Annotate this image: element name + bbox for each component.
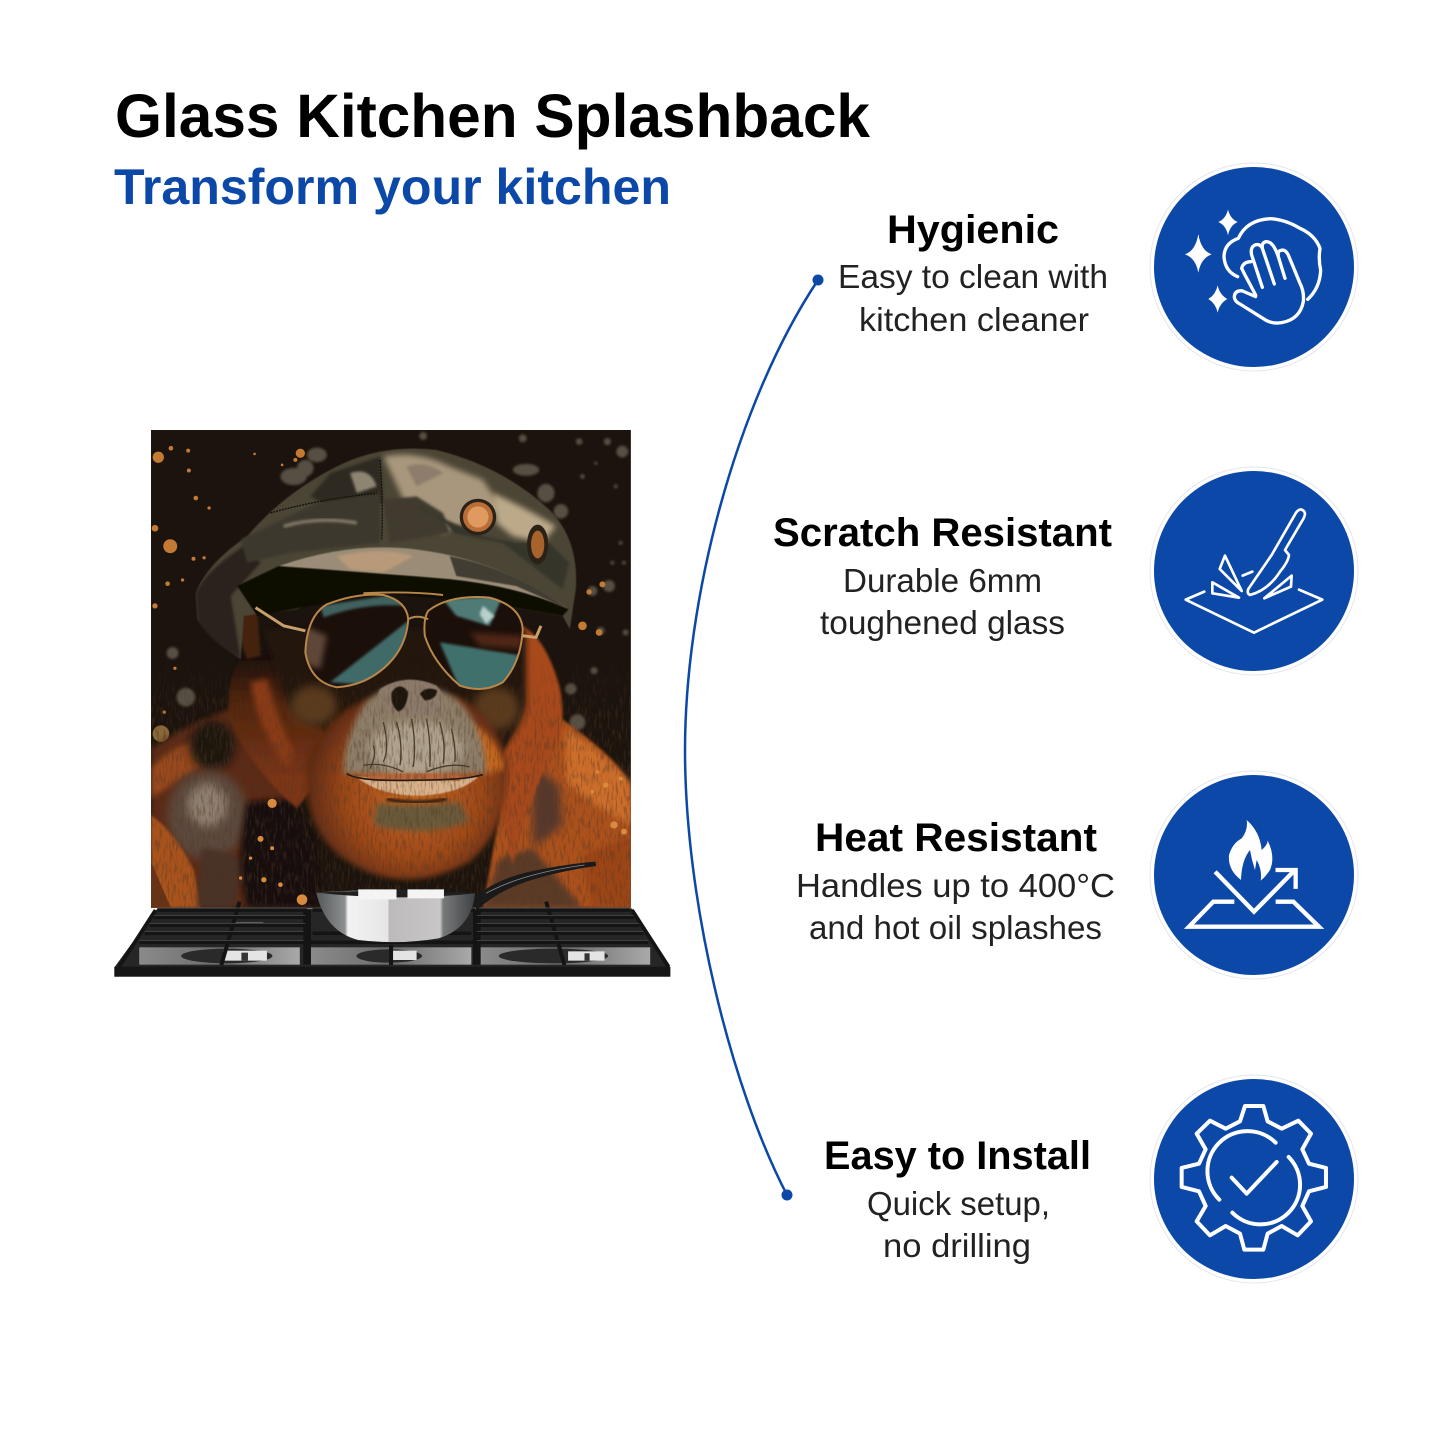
feature: Easy to Install: no drilling bbox=[883, 1227, 1031, 1264]
frame bbox=[305, 592, 523, 689]
subtitle: Transform your kitchen bbox=[114, 159, 671, 215]
feature: Heat Resistant: Handles up to 400°C bbox=[796, 867, 1115, 904]
right lens reflections bbox=[440, 596, 523, 692]
steel burner wells bbox=[139, 947, 650, 965]
icon: knife scratching glass bbox=[1150, 467, 1358, 675]
ear bbox=[242, 614, 262, 660]
background bbox=[151, 430, 631, 908]
feature: Hygienic: Easy to clean with bbox=[838, 258, 1108, 295]
burners bbox=[181, 923, 608, 963]
cap eyelets bbox=[460, 499, 496, 535]
feature: Scratch Resistant: Durable 6mm bbox=[843, 562, 1042, 599]
cap brim bbox=[279, 547, 569, 609]
orangutan face bbox=[264, 629, 526, 879]
icon: gear with check mark bbox=[1150, 1075, 1358, 1283]
aviator sunglasses bbox=[256, 592, 541, 692]
feature: Easy to Install bbox=[824, 1134, 1091, 1264]
feature: Easy to Install: Easy to Install bbox=[824, 1134, 1091, 1178]
feature: Hygienic: kitchen cleaner bbox=[859, 301, 1089, 338]
nose bbox=[378, 679, 442, 698]
fur texture bbox=[151, 656, 631, 908]
product image: gas hob with pan bbox=[114, 862, 670, 977]
feature: Easy to Install: Quick setup, bbox=[867, 1185, 1050, 1222]
feature: Heat Resistant bbox=[796, 816, 1115, 946]
frying pan bbox=[316, 862, 596, 942]
icon: flame over glass with arrow bbox=[1150, 771, 1358, 979]
pan handle bbox=[471, 862, 596, 910]
orangutan hair bbox=[229, 626, 563, 865]
connector curve bbox=[685, 274, 824, 1200]
feature: Scratch Resistant: Scratch Resistant bbox=[773, 511, 1112, 555]
product image: splashback artwork bbox=[151, 430, 631, 908]
title: Glass Kitchen Splashback bbox=[115, 82, 870, 150]
mouth bbox=[357, 777, 478, 796]
infographic canvas bbox=[114, 92, 1358, 1284]
hob surface bbox=[114, 908, 670, 977]
hob front edge bbox=[114, 967, 670, 977]
flat cap bbox=[196, 448, 576, 659]
feature: Heat Resistant: Heat Resistant bbox=[815, 816, 1097, 860]
more splatter on fur bbox=[239, 770, 627, 905]
feature: Scratch Resistant bbox=[773, 511, 1112, 641]
grate highlights bbox=[139, 908, 648, 940]
paint splatter bbox=[152, 431, 630, 742]
feature: Scratch Resistant: toughened glass bbox=[820, 604, 1065, 641]
feature: Hygienic bbox=[838, 208, 1108, 338]
feature: Heat Resistant: and hot oil splashes bbox=[809, 909, 1102, 946]
flame bbox=[1229, 820, 1272, 881]
feature: Hygienic: Hygienic bbox=[887, 208, 1059, 252]
pan supports bbox=[119, 902, 668, 967]
orangutan body bbox=[151, 696, 631, 908]
icon: hand wiping with sparkles bbox=[1150, 163, 1358, 371]
left lens reflections bbox=[300, 593, 408, 686]
